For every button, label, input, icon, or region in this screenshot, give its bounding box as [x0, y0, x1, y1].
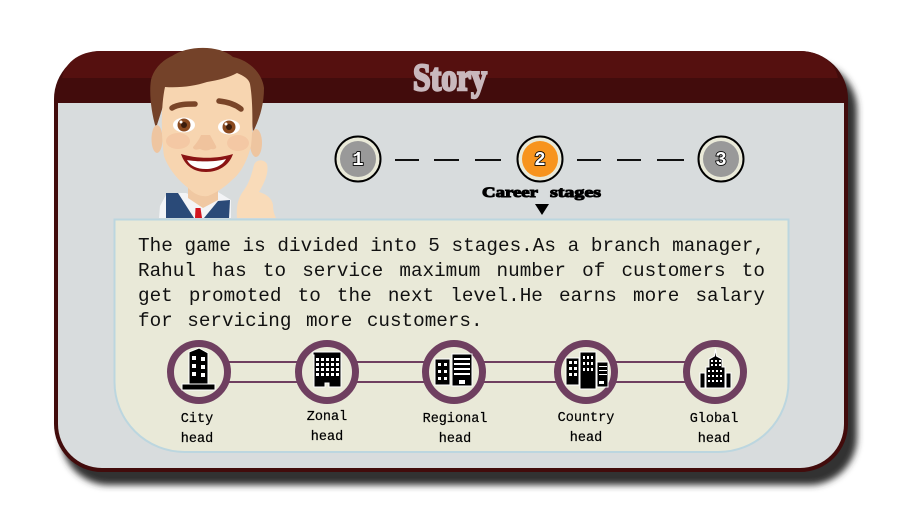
character: smiling manager [150, 48, 276, 218]
story paragraph: get promoted to the next level.He earns more salary [138, 285, 765, 307]
stage: Zonal head: Zonal [307, 410, 347, 425]
stage: Country head [558, 344, 614, 446]
stage: Global head: Global [690, 412, 738, 427]
dashed connectors [395, 159, 684, 161]
stage: City head: head [181, 432, 213, 447]
step 1 [336, 136, 380, 182]
step 2 [518, 136, 562, 182]
label: Career stages [482, 185, 601, 201]
nose [193, 135, 216, 150]
step 3 [698, 136, 744, 182]
stage: Zonal head [298, 344, 356, 445]
stage: Regional head: head [439, 432, 471, 447]
panel: story text [114, 220, 788, 452]
panel: story card [54, 51, 857, 485]
story paragraph: The game is divided into 5 stages.As a branch manager, [138, 235, 765, 257]
step 2: 2 [534, 149, 546, 171]
step 1: 1 [352, 149, 364, 171]
stage: Regional head [423, 344, 487, 447]
label: Career stages: Career [482, 185, 538, 201]
thumbs up hand [237, 160, 276, 218]
mouth [181, 154, 233, 172]
stepper: career stages [336, 136, 744, 182]
brows [172, 101, 241, 109]
cheeks [166, 133, 249, 151]
story paragraph: for servicing more customers. [138, 310, 483, 332]
stage: Regional head: Regional [423, 412, 487, 427]
vest and shirt [159, 186, 231, 218]
heading: Story: Story [413, 57, 487, 99]
step 3: 3 [715, 149, 727, 171]
label: Career stages: stages [550, 185, 601, 201]
stage: City head: City [181, 412, 213, 427]
stage: Global head: head [698, 432, 730, 447]
eyes [173, 118, 240, 134]
story paragraph: Rahul has to service maximum number of customers to [138, 260, 765, 282]
career path chart [170, 344, 744, 447]
arrow: pointer down [535, 204, 549, 215]
hair [150, 48, 264, 132]
stage: Zonal head: head [311, 430, 343, 445]
stage: Country head: head [570, 431, 602, 446]
stage: Global head [686, 344, 744, 447]
ears [152, 125, 262, 157]
face [162, 73, 252, 196]
stage: Country head: Country [558, 411, 614, 426]
story paragraph [138, 235, 765, 332]
stage: City head [170, 344, 228, 447]
